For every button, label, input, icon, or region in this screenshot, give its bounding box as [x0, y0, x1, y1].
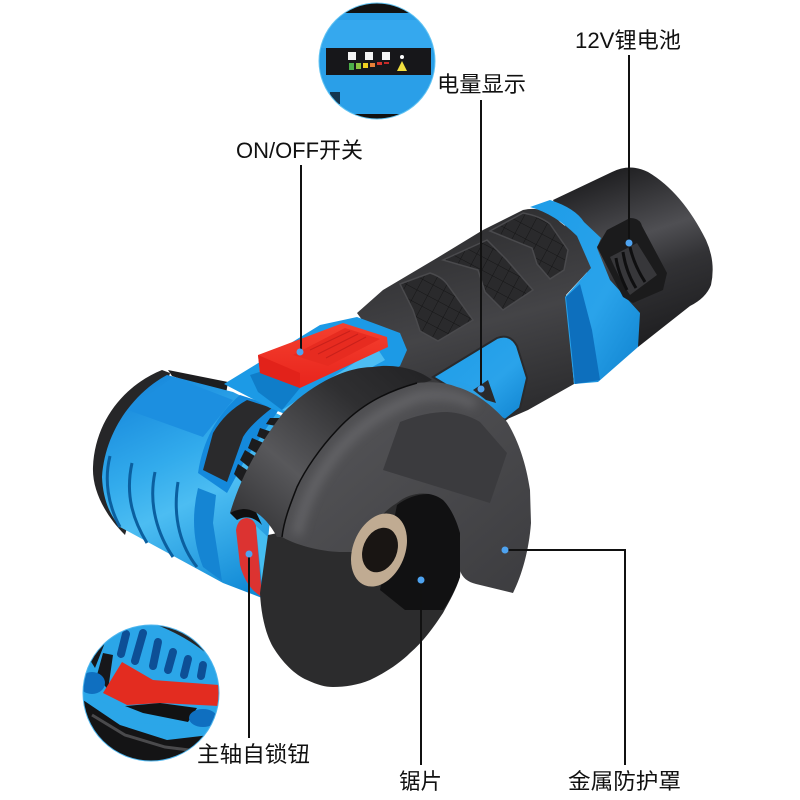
- motor end black cap: [93, 370, 170, 535]
- grip pad rear: [490, 213, 568, 279]
- cooling ribs: [234, 418, 281, 482]
- head light panel: [128, 377, 233, 437]
- black notch above lock ring: [230, 508, 262, 525]
- slot surround: [198, 395, 280, 493]
- handle body: [357, 209, 591, 420]
- battery latch: [597, 218, 667, 303]
- blue switch rail: [282, 348, 385, 412]
- vent block: [194, 488, 222, 581]
- cutting disc: [260, 480, 462, 687]
- red ON/OFF switch: [258, 323, 388, 388]
- guard label plate: [383, 412, 507, 503]
- callout: 12V battery: 12V锂电池: [575, 28, 681, 53]
- guard seam line: [282, 383, 417, 537]
- handle blue indicator panel: [433, 337, 527, 420]
- callout: metal guard: 金属防护罩: [568, 769, 681, 794]
- product: angle grinder illustration: [79, 3, 713, 761]
- spindle lock badge: [79, 625, 219, 761]
- callout: ON/OFF switch: ON/OFF开关: [236, 138, 363, 163]
- guard front plate: [282, 382, 531, 593]
- indicator dark tab: [473, 380, 496, 403]
- collar shadow: [566, 284, 600, 384]
- black slot: [203, 400, 272, 482]
- callout: spindle lock button: [197, 550, 310, 767]
- grip pad front: [400, 273, 473, 341]
- guard highlight arc: [297, 395, 475, 535]
- callout: saw blade: [399, 576, 442, 794]
- red lock ring: [236, 518, 262, 597]
- top black trim: [168, 370, 228, 394]
- battery pack: [553, 168, 713, 347]
- cyan ring beside the lock: [256, 526, 268, 585]
- hub washer: [341, 505, 417, 595]
- power display badge: [319, 3, 435, 119]
- switch blue base: [224, 317, 407, 420]
- callout: ON/OFF switch: [236, 138, 363, 356]
- callout: 12V battery: [575, 28, 681, 246]
- disc dark interior seen through the guard: [380, 494, 462, 610]
- callout: metal guard: [502, 546, 681, 794]
- vent slits: [107, 456, 197, 567]
- callout: power display: 电量显示: [437, 72, 526, 97]
- grip pad middle: [443, 240, 533, 310]
- guard rear band: [230, 366, 432, 537]
- callout: saw blade: 锯片: [399, 769, 442, 794]
- motor head blue housing: [102, 375, 290, 598]
- hub bolt: [356, 522, 404, 578]
- callout: power display: [437, 72, 526, 392]
- battery collar blue band: [530, 200, 640, 384]
- switch sliding slot detail: [250, 370, 300, 410]
- callout: spindle lock button: 主轴自锁钮: [197, 742, 310, 767]
